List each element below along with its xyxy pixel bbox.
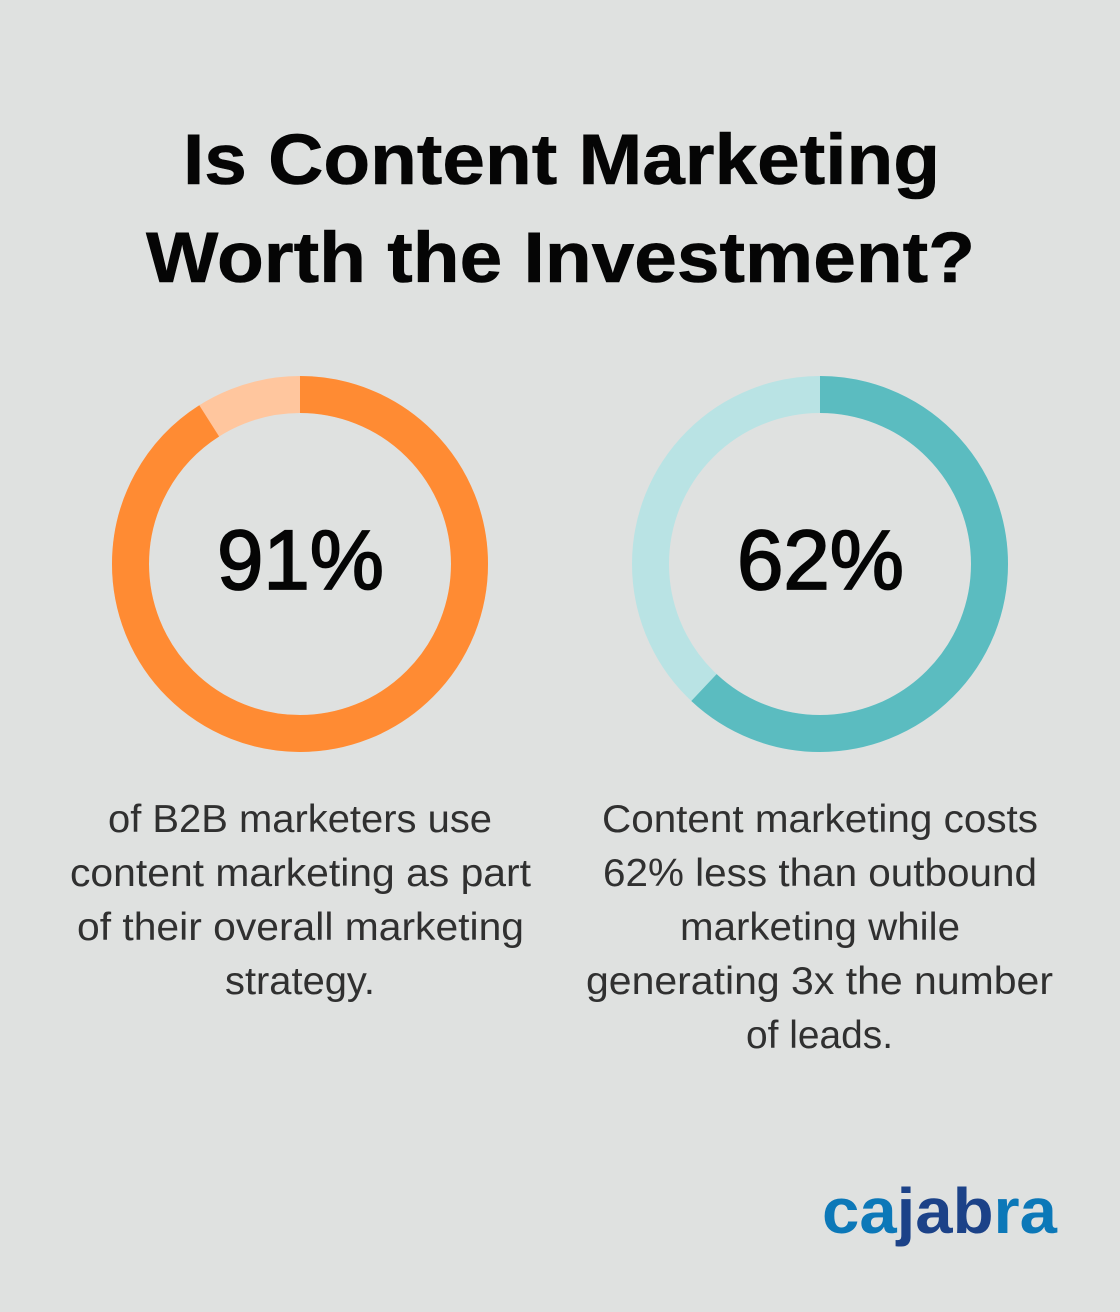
description: 91% stat: strategy.: [225, 960, 375, 1003]
description: 62% stat: Content marketing costs: [602, 798, 1038, 841]
stat value: 62%: 62%: [737, 513, 904, 607]
logo: cajabra: cajabra: [822, 1175, 1057, 1247]
donut chart: 91%: [130, 394, 470, 734]
description: 62% stat: [586, 798, 1053, 1057]
description: 62% stat: generating 3x the number: [586, 960, 1053, 1003]
description: 91% stat: [70, 798, 531, 1003]
description: 91% stat: of B2B marketers use: [108, 798, 492, 841]
description: 62% stat: 62% less than outbound: [603, 852, 1037, 895]
description: 91% stat: content marketing as part: [70, 852, 531, 895]
description: 62% stat: of leads.: [746, 1014, 893, 1057]
title: [146, 121, 975, 298]
description: 62% stat: marketing while: [680, 906, 960, 949]
title: Is Content Marketing: [183, 121, 940, 200]
title: Worth the Investment?: [146, 219, 975, 298]
panel: 91% stat: [70, 394, 531, 1003]
stat value: 91%: 91%: [217, 513, 384, 607]
description: 91% stat: of their overall marketing: [77, 906, 524, 949]
panel: 62% stat: [586, 394, 1053, 1057]
donut chart: 62%: [650, 394, 990, 734]
